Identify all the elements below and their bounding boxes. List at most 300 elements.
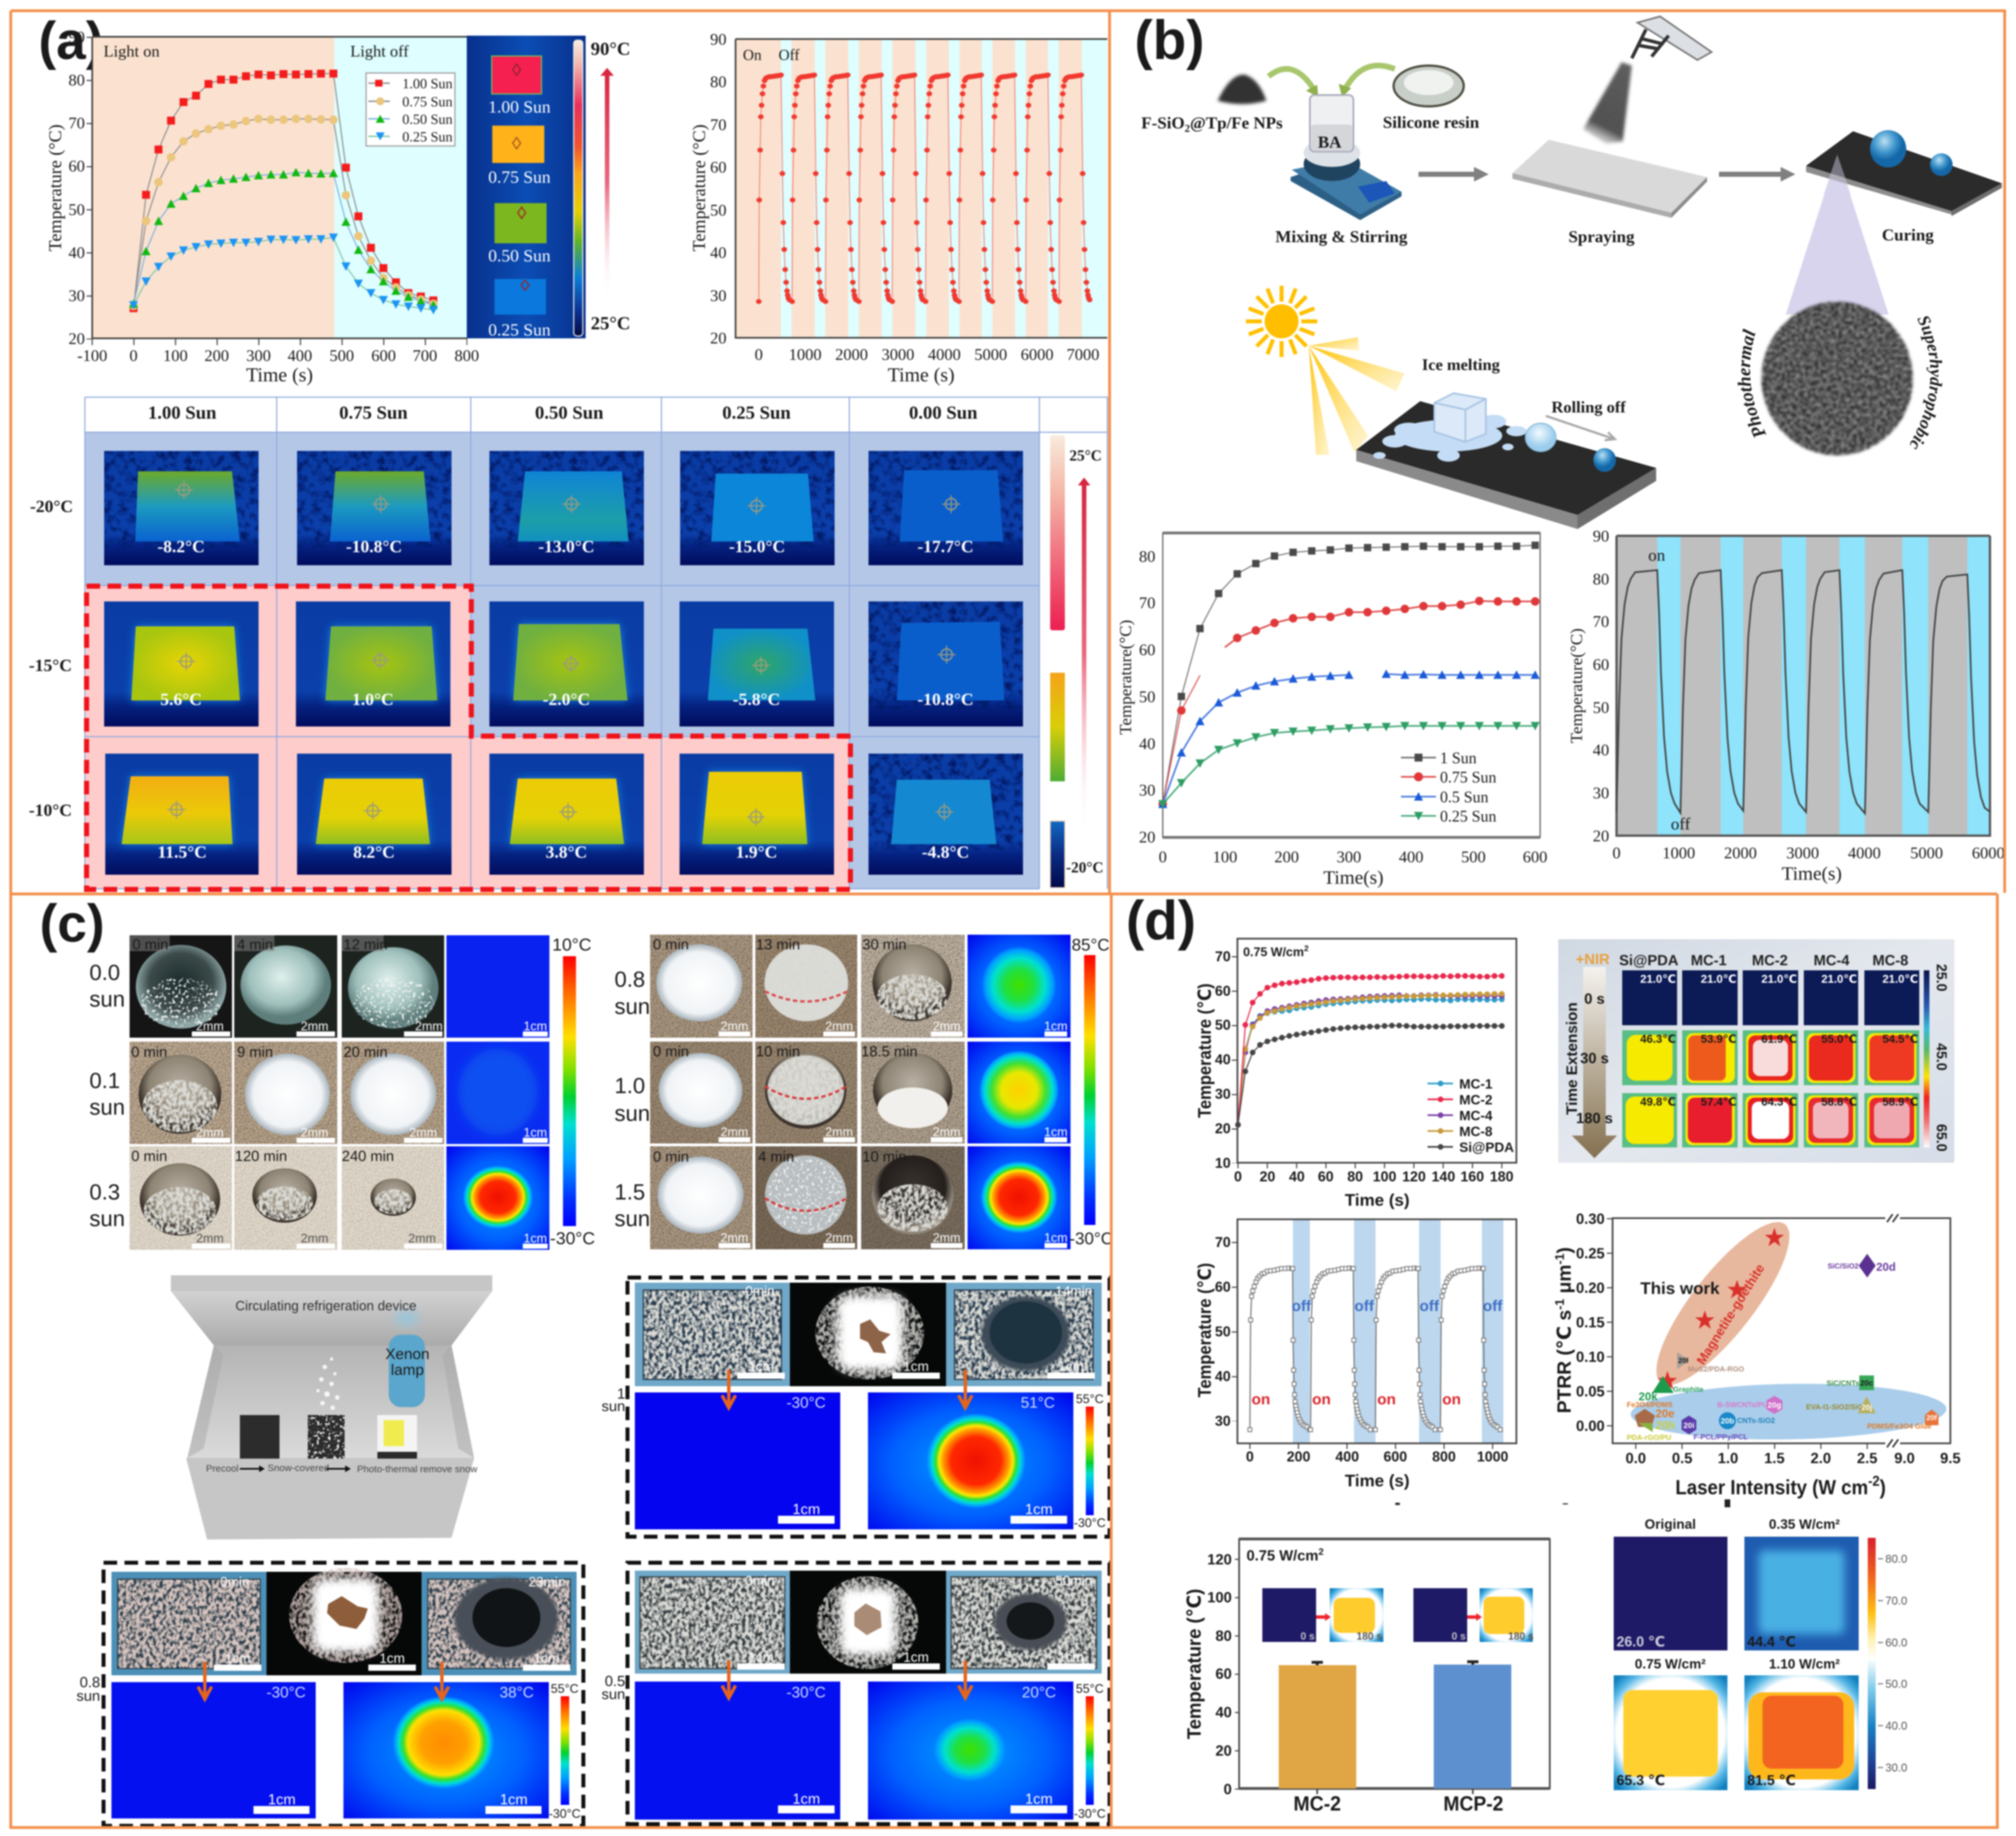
thermal images at four sun intensities with colour bar [467, 36, 586, 339]
arrowhead: spraying to curing [1781, 167, 1795, 182]
photo row: 0.3 sun: 2mm [409, 1231, 436, 1245]
chart: six on/off cycles with grey and cyan bands: 90 [1593, 527, 1609, 545]
chart: heating and cooling curves at four sun intensities: 50 [68, 201, 85, 219]
chart: four NIR on/off cycles: 40 [1215, 1369, 1231, 1384]
chart: PTRR versus laser intensity: -1 [1553, 1298, 1567, 1310]
snow removal panel: 0.5 sun [601, 1563, 1110, 1824]
thermal cell: -20°C, 0.25 Sun: -15.0°C [729, 536, 785, 556]
chart: heating and cooling curves at four sun intensities: 70 [68, 114, 85, 132]
chart: ten on/off heating cycles: Time (s) [888, 364, 955, 386]
chart: heating and cooling curves at four sun intensities: Time (s) [246, 364, 313, 386]
chart: PTRR versus laser intensity: 0.30 [1576, 1210, 1605, 1227]
process labels: Silicone resin [1383, 113, 1480, 132]
literature comparison markers: MoS2/PDA-RGO [1688, 1365, 1744, 1373]
photo row: 0.0 sun: 4 min [237, 936, 273, 953]
chart: six on/off cycles with grey and cyan bands: 30 [1593, 784, 1609, 802]
row: 180 s: 58.9℃ [1882, 1096, 1918, 1108]
dashed red outline: conditions above freezing [87, 586, 850, 889]
row: 30 s: 55.0℃ [1821, 1033, 1857, 1046]
chart: heating curves for MC samples: 120 [1402, 1169, 1426, 1185]
thermal cell: -10°C, 1.00 Sun: 11.5°C [157, 842, 207, 862]
sun intensity labels, left grid: sun [89, 1207, 125, 1231]
snow removal panel: 0.8 sun: -30°C [549, 1807, 581, 1821]
table colour scale and arrow [1050, 435, 1103, 888]
chart: heating curves for MC samples: 160 [1460, 1169, 1484, 1185]
chart: PTRR versus laser intensity: ) [1880, 1476, 1886, 1499]
chart: four NIR on/off cycles: on [1442, 1391, 1461, 1408]
snow removal panel: 0.5 sun: 20°C [1022, 1684, 1056, 1701]
photo row: 0.3 sun: 120 min [235, 1147, 287, 1164]
thermal maps column, left grid [446, 935, 549, 1250]
chart: ten on/off heating cycles: 30 [710, 287, 727, 305]
chart: PTRR versus laser intensity: 0.20 [1576, 1279, 1605, 1296]
chart: heating curves at four sun intensities: 100 [1213, 848, 1237, 866]
thermal cell: -15°C, 0.50 Sun [489, 601, 644, 726]
photo row: 1.5 sun: 2mm [826, 1231, 853, 1245]
snow removal panel: 0.5 sun: 1cm [903, 1650, 929, 1665]
snow removal panel: 0.5 sun: 1cm [792, 1790, 820, 1807]
thermal images at four sun intensities with colour bar: 0.50 Sun [488, 246, 551, 265]
thermal image matrix with time extension arrow: 30 s [1580, 1050, 1609, 1067]
thermal maps at four laser intensities with colour bar: 70.0 [1885, 1595, 1907, 1607]
chart: heating curves for MC samples: 2 [1304, 944, 1309, 953]
legend: MC-8 [1459, 1124, 1493, 1140]
colour scale, left grid [550, 935, 595, 1248]
chart: heating curves at four sun intensities: 40 [1139, 735, 1155, 753]
chart: PTRR versus laser intensity: 0.5 [1672, 1450, 1692, 1467]
chart: ten on/off heating cycles: 60 [710, 158, 727, 177]
row: 0 s: 21.0℃ [1882, 973, 1918, 986]
photo row: 0.3 sun: 2mm [196, 1231, 223, 1245]
legend: MC-4 [1459, 1108, 1493, 1124]
chart: heating curves for MC samples: 20 [1260, 1169, 1275, 1185]
thermal cell: -20°C, 0.00 Sun [869, 451, 1023, 565]
colour scale, right grid: -30°C [1069, 1229, 1113, 1248]
chart: four NIR on/off cycles: off [1355, 1297, 1374, 1314]
curved label: Photothermal: Photothermal [1736, 328, 1768, 439]
row: 0 s: 21.0℃ [1701, 973, 1736, 986]
thermal maps at four laser intensities with colour bar: Original [1645, 1517, 1696, 1532]
photo row: 1.0 sun: 0 min [653, 1043, 689, 1060]
thermal maps at four laser intensities with colour bar: 30.0 [1885, 1762, 1907, 1774]
table column headers: 0.75 Sun [339, 403, 408, 423]
chart: six on/off cycles with grey and cyan bands: 6000 [1972, 844, 2005, 862]
chart: heating curves at four sun intensities: 300 [1336, 848, 1361, 866]
snow removal panel: 1 sun: 51°C [1021, 1394, 1055, 1411]
chart: four NIR on/off cycles: 800 [1432, 1449, 1456, 1465]
thermal cell: -15°C, 1.00 Sun: 5.6°C [160, 689, 202, 709]
legend: 1.00 Sun [402, 76, 453, 92]
row: 30 s: 61.9℃ [1761, 1033, 1797, 1046]
process labels: Spraying [1568, 227, 1635, 246]
micrograph circle [1761, 302, 1913, 455]
thermal maps column, right grid: 1cm [1044, 1231, 1068, 1245]
chart: heating curves for MC samples: Temperature (℃) [1194, 983, 1215, 1118]
thermal maps at four laser intensities with colour bar: 81.5 ℃ [1747, 1773, 1796, 1788]
photo row: 0.8 sun: 30 min [862, 936, 906, 953]
snow removal panel: 1 sun [601, 1278, 1110, 1537]
sun intensity labels, right grid: 1.5 [614, 1180, 645, 1205]
photo row: 0.1 sun: 9 min [237, 1043, 273, 1060]
process labels: BA [1318, 133, 1342, 152]
table column headers: 0.25 Sun [722, 403, 791, 423]
illustration: circulating refrigeration device: Xenon [385, 1345, 429, 1362]
chart: six on/off cycles with grey and cyan bands: Temperature(°C) [1567, 628, 1586, 743]
chart: ten on/off heating cycles: 1000 [789, 346, 822, 364]
chart: heating curves for MC samples: 10 [1215, 1155, 1231, 1171]
colour scale, left grid: 10°C [552, 935, 591, 954]
literature comparison markers: 20h [1656, 1420, 1675, 1432]
thermal cell: -15°C, 1.00 Sun [104, 601, 259, 726]
chart: heating and cooling curves at four sun intensities: 400 [287, 347, 312, 365]
chart: heating and cooling curves at four sun intensities: 300 [246, 347, 271, 365]
sun intensity labels, left grid: 0.3 [89, 1180, 120, 1205]
thermal maps at four laser intensities with colour bar: 0.75 W/cm² [1635, 1657, 1706, 1672]
literature comparison markers: F-PCL/PPy/PCL [1693, 1433, 1748, 1441]
chart: heating curves at four sun intensities: 500 [1461, 848, 1486, 866]
literature comparison markers: CNTs-SiO2 [1737, 1416, 1775, 1425]
table column headers: 1.00 Sun [148, 403, 217, 423]
chart: PTRR versus laser intensity: 9.5 [1940, 1450, 1961, 1467]
chart: PTRR versus laser intensity: 1.5 [1764, 1450, 1785, 1467]
snow removal panel: 0.5 sun: 50min [1055, 1573, 1092, 1589]
snow removal panel: 1 sun: -30°C [786, 1394, 826, 1411]
colour scale [1924, 964, 1949, 1151]
chart: PTRR versus laser intensity: -1 [1553, 1253, 1567, 1265]
snow removal panel: 0.5 sun: sun [601, 1685, 625, 1702]
snow removal panel: 1 sun: sun [601, 1398, 625, 1414]
photo row: 1.0 sun: 2mm [933, 1125, 960, 1139]
bar chart: MC-2 and MCP-2 temperature: 100 [1207, 1589, 1232, 1606]
chart: heating and cooling curves at four sun intensities: 80 [68, 71, 85, 89]
literature comparison markers: SiC/CNTs [1826, 1379, 1859, 1387]
chart: heating curves at four sun intensities: Temperature(°C) [1116, 620, 1135, 735]
process labels: F-SiO [1141, 114, 1185, 132]
chart: six on/off cycles with grey and cyan bands: 3000 [1786, 844, 1819, 862]
sun intensity labels, right grid: 0.8 [614, 968, 645, 992]
chart: heating curves for MC samples: 40 [1289, 1169, 1305, 1185]
literature comparison markers [1627, 1254, 1938, 1442]
panel: d — NIR photothermal performance [1126, 889, 1961, 1815]
chart: six on/off cycles with grey and cyan bands [1567, 527, 2005, 884]
thermal cell: -15°C, 0.25 Sun: -5.8°C [733, 689, 780, 709]
thermal image matrix with time extension arrow [1558, 939, 1954, 1163]
arrowhead: mixing to spraying [1474, 167, 1489, 182]
chart: heating curves for MC samples: 30 [1215, 1086, 1231, 1102]
arrow: spraying to curing [1719, 172, 1781, 177]
sun intensity labels, left grid: 0.1 [89, 1069, 120, 1093]
chart: heating and cooling curves at four sun intensities: 200 [204, 347, 229, 365]
chart: six on/off cycles with grey and cyan bands: on [1648, 546, 1665, 565]
chart: PTRR versus laser intensity: μm [1554, 1265, 1575, 1298]
colour bar labels and red gradient arrow [591, 39, 630, 334]
chart: PTRR versus laser intensity: 1.0 [1718, 1450, 1738, 1467]
photo row: 0.1 sun: 2mm [196, 1125, 223, 1140]
chart: PTRR versus laser intensity: 0.00 [1576, 1417, 1605, 1434]
chart: four NIR on/off cycles: 60 [1215, 1279, 1231, 1295]
legend: 0.25 Sun [402, 130, 453, 145]
legend: MC-2 [1459, 1093, 1493, 1108]
chart: four NIR on/off cycles: 30 [1215, 1413, 1231, 1429]
curved label: Superhydrophobic: Superhydrophobic [1909, 315, 1943, 450]
photo row: 0.0 sun: 2mm [196, 1019, 223, 1033]
row: 180 s: 58.8℃ [1821, 1096, 1857, 1108]
thermal image matrix with time extension arrow: MC-8 [1872, 952, 1908, 969]
chart: four NIR on/off cycles: on [1312, 1391, 1331, 1408]
chart: heating and cooling curves at four sun intensities: 90 [68, 28, 85, 46]
sun intensity labels, right grid: sun [614, 1102, 650, 1126]
chart: PTRR versus laser intensity [1553, 1205, 1961, 1499]
thermal cell: -10°C, 0.25 Sun [680, 754, 834, 875]
sun intensity labels, right grid [614, 968, 650, 1231]
literature comparison markers: Graphite [1673, 1385, 1703, 1394]
chart: PTRR versus laser intensity: 0.10 [1576, 1348, 1605, 1365]
chart: PTRR versus laser intensity: Magnetite-goethite [1693, 1261, 1767, 1367]
chart: four NIR on/off cycles: 200 [1287, 1449, 1310, 1465]
thermal cell: -10°C, 0.00 Sun: -4.8°C [922, 842, 969, 862]
snow removal panel: 0.8 sun: 1cm [500, 1791, 528, 1808]
thermal images at four sun intensities with colour bar: 0.75 Sun [488, 167, 551, 187]
chart: PTRR versus laser intensity: 2.0 [1811, 1450, 1831, 1467]
chart: PTRR versus laser intensity: PTRR (℃ s [1554, 1310, 1575, 1413]
bar chart: MC-2 and MCP-2 temperature: 60 [1215, 1665, 1232, 1682]
chart: heating and cooling curves at four sun intensities: 40 [68, 244, 85, 262]
bar chart: MC-2 and MCP-2 temperature: 80 [1215, 1627, 1232, 1644]
row: 180 s: 57.4℃ [1701, 1096, 1736, 1108]
thermal maps at four laser intensities with colour bar: 44.4 ℃ [1747, 1634, 1796, 1650]
chart: six on/off cycles with grey and cyan bands: 80 [1593, 570, 1609, 588]
sun intensity labels, left grid [89, 961, 125, 1231]
photo row: 0.0 sun: 2mm [301, 1019, 328, 1033]
chart: PTRR versus laser intensity: Laser Intensity (W cm [1675, 1476, 1886, 1499]
snow removal panel: 1 sun: 1cm [903, 1359, 929, 1374]
thermal maps column, right grid [968, 935, 1071, 1249]
chart: six on/off cycles with grey and cyan bands: 40 [1593, 741, 1609, 759]
photo row: 0.0 sun: 0 min [132, 936, 169, 953]
thermal maps at four laser intensities with colour bar: 50.0 [1885, 1678, 1907, 1691]
chart: heating curves at four sun intensities: 70 [1139, 594, 1155, 612]
chart: four NIR on/off cycles: Time (s) [1345, 1472, 1409, 1490]
table row labels: -10°C [29, 800, 72, 820]
chart: heating and cooling curves at four sun intensities: 0 [130, 347, 137, 365]
thermal image matrix with time extension arrow: Time Extension [1563, 1002, 1580, 1115]
colour scale: 45.0 [1933, 1043, 1949, 1070]
snow removal panel: 1 sun: 55°C [1076, 1392, 1104, 1406]
table column headers: 0.50 Sun [535, 403, 604, 423]
chart: six on/off cycles with grey and cyan bands: 0 [1613, 844, 1620, 862]
legend: 0.75 Sun [1440, 769, 1497, 786]
chart: ten on/off heating cycles: 3000 [882, 346, 914, 364]
thermal cell: -15°C, 0.75 Sun [296, 601, 450, 726]
sun intensity labels, left grid: 0.0 [89, 961, 120, 985]
chart: ten on/off heating cycles: 0 [755, 346, 763, 364]
snow removal panel: 1 sun: 14min [1055, 1284, 1092, 1299]
chart: four NIR on/off cycles: on [1377, 1391, 1396, 1408]
snow removal panel: 0.8 sun [76, 1563, 583, 1826]
chart: PTRR versus laser intensity: 0.0 [1626, 1450, 1646, 1467]
photo row: 1.0 sun [650, 1042, 965, 1143]
chart: heating curves at four sun intensities: 400 [1399, 848, 1424, 866]
row: 180 s: 64.3℃ [1761, 1096, 1797, 1108]
sun intensity labels, left grid: sun [89, 987, 125, 1012]
snow removal panel: 0.5 sun: -30°C [1074, 1807, 1106, 1821]
photo row: 0.1 sun: 20 min [343, 1043, 388, 1060]
chart: heating curves for MC samples: 140 [1432, 1169, 1455, 1185]
chart: six on/off cycles with grey and cyan bands: 5000 [1910, 844, 1943, 862]
snow removal panel: 0.5 sun: -30°C [786, 1684, 826, 1701]
bar chart: MC-2 and MCP-2 temperature: 20 [1215, 1742, 1232, 1759]
thermal maps at four laser intensities with colour bar: 80.0 [1885, 1553, 1907, 1566]
table colour scale and arrow: 25°C [1069, 447, 1102, 464]
illustration: circulating refrigeration device: Circulating refrigeration device [235, 1298, 416, 1314]
chart: six on/off cycles with grey and cyan bands: off [1671, 815, 1690, 833]
snow removal panel: 1 sun: 1cm [792, 1500, 820, 1517]
chart: PTRR versus laser intensity: ) [1554, 1247, 1575, 1253]
chart: four NIR on/off cycles: 0 [1246, 1449, 1254, 1465]
sun intensity labels, right grid: 1.0 [614, 1074, 645, 1098]
thermal maps column, left grid: 1cm [523, 1019, 547, 1033]
chart: PTRR versus laser intensity: 0.05 [1576, 1383, 1605, 1400]
chart: four NIR on/off cycles: off [1483, 1297, 1503, 1314]
literature comparison markers: PDA-rGO/PU [1627, 1433, 1671, 1442]
chart: four NIR on/off cycles: 1000 [1477, 1449, 1508, 1465]
photo row: 0.1 sun: 2mm [301, 1125, 328, 1140]
table row labels: -15°C [29, 655, 72, 675]
snow removal panel: 1 sun: 1 [617, 1385, 625, 1402]
chart: six on/off cycles with grey and cyan bands: 50 [1593, 699, 1609, 717]
thermal cell: -15°C, 0.00 Sun: -10.8°C [917, 689, 974, 709]
snow removal panel: 0.8 sun: sun [76, 1687, 100, 1704]
colour scale, right grid [1069, 936, 1113, 1248]
ice melting labels [1422, 356, 1626, 416]
chart: heating and cooling curves at four sun intensities: 600 [371, 347, 396, 365]
chart: ten on/off heating cycles: 4000 [928, 346, 961, 364]
chart: heating curves for MC samples: 20 [1215, 1121, 1231, 1137]
chart: four NIR on/off cycles: Temperature (℃) [1194, 1263, 1215, 1398]
sun intensity labels, left grid: sun [89, 1095, 125, 1120]
chart: heating curves for MC samples: 60 [1215, 983, 1231, 999]
panel label c: (c) [40, 893, 105, 953]
thermal maps column, right grid: 1cm [1044, 1125, 1068, 1139]
chart: heating curves for MC samples [1194, 939, 1516, 1210]
chart: heating curves at four sun intensities: 0 [1159, 848, 1167, 866]
photo row: 0.0 sun [130, 935, 444, 1038]
chart: heating curves at four sun intensities: 600 [1523, 848, 1548, 866]
row: 30 s: 54.5℃ [1882, 1033, 1918, 1046]
bar chart: MC-2 and MCP-2 temperature: MCP-2 [1443, 1792, 1503, 1815]
snow removal panel: 1 sun: 1cm [1025, 1500, 1053, 1517]
photo row: 0.1 sun: 2mm [410, 1125, 437, 1140]
literature comparison markers: 20i [1683, 1421, 1695, 1430]
thermal cell: -20°C, 1.00 Sun [104, 451, 259, 565]
chart: PTRR versus laser intensity: This work [1640, 1279, 1720, 1298]
legend: 0.75 Sun [402, 94, 453, 110]
photo row: 0.8 sun: 0 min [653, 936, 689, 953]
inset thermal pairs [1262, 1588, 1534, 1642]
illustration: circulating refrigeration device: Snow-covered [268, 1463, 329, 1473]
chart: heating and cooling curves at four sun intensities: 30 [68, 287, 85, 305]
literature comparison markers: PDMS/Fe3O4 Glue [1867, 1422, 1931, 1430]
photo row: 0.3 sun: 0 min [131, 1147, 167, 1164]
photo row: 0.0 sun: 12 min [343, 936, 388, 953]
ice melting labels: Ice melting [1422, 356, 1500, 374]
photo row: 0.1 sun: 0 min [131, 1043, 167, 1060]
thermal cell: -20°C, 0.75 Sun: -10.8°C [346, 536, 402, 556]
thermal cell: -20°C, 1.00 Sun: -8.2°C [157, 536, 205, 556]
chart: heating curves at four sun intensities [1116, 533, 1548, 888]
colour scale, left grid: -30°C [550, 1228, 595, 1248]
chart: heating and cooling curves at four sun intensities: Light off [350, 42, 409, 61]
chart: ten on/off heating cycles: 2000 [835, 346, 868, 364]
chart: ten on/off heating cycles: 5000 [974, 346, 1007, 364]
chart: heating and cooling curves at four sun intensities: -100 [77, 347, 108, 365]
photo row: 0.8 sun: 2mm [721, 1019, 748, 1033]
chart: heating and cooling curves at four sun intensities [45, 28, 479, 386]
thermal maps at four laser intensities with colour bar: 26.0 ℃ [1617, 1634, 1665, 1650]
ice melting labels: Rolling off [1551, 398, 1626, 416]
row: 0 s: 21.0℃ [1761, 973, 1797, 986]
process labels: 2 [1185, 123, 1190, 135]
legend: MC-1 [1459, 1077, 1493, 1092]
photo row: 1.0 sun: 2mm [826, 1125, 853, 1139]
chart: PTRR versus laser intensity: 2.5 [1857, 1450, 1877, 1467]
thermal cell: -10°C, 0.75 Sun [297, 754, 452, 875]
table row labels: -20°C [30, 496, 73, 516]
chart: heating curves for MC samples: 70 [1215, 949, 1231, 965]
row: 180 s [1622, 1093, 1919, 1147]
chart: heating curves at four sun intensities: 50 [1139, 688, 1155, 706]
snow removal panel: 0.5 sun: 55°C [1076, 1682, 1104, 1696]
legend [366, 73, 455, 146]
table column headers [148, 403, 978, 423]
colour bar labels and red gradient arrow: 90°C [591, 39, 630, 59]
chart: heating and cooling curves at four sun intensities: 20 [68, 330, 85, 348]
snow removal panel: 0.8 sun: 23min [528, 1575, 565, 1590]
chart: six on/off cycles with grey and cyan bands: 1000 [1662, 844, 1695, 862]
chart: heating curves for MC samples: 100 [1373, 1169, 1396, 1185]
photo row: 1.5 sun: 4 min [758, 1148, 794, 1165]
chart: heating curves for MC samples: 80 [1347, 1169, 1363, 1185]
colour bar labels and red gradient arrow: 25°C [591, 313, 630, 334]
chart: heating curves at four sun intensities: 80 [1139, 548, 1155, 566]
chart: ten on/off heating cycles: 7000 [1067, 346, 1099, 364]
thermal cell: -10°C, 0.50 Sun: 3.8°C [545, 842, 587, 862]
row: 30 s: 53.9℃ [1701, 1033, 1736, 1046]
table column headers: 0.00 Sun [909, 403, 978, 423]
thermal maps column, left grid: 1cm [523, 1231, 547, 1245]
photo row: 0.8 sun: 2mm [826, 1019, 853, 1033]
photo row: 0.3 sun: 2mm [301, 1231, 328, 1245]
chart: ten on/off heating cycles: Off [779, 46, 799, 63]
sun intensity labels, right grid: sun [614, 995, 650, 1019]
illustration: ice melting on coated slab [1356, 393, 1656, 529]
chart: six on/off cycles with grey and cyan bands: 2000 [1724, 844, 1757, 862]
thermal image matrix with time extension arrow: +NIR [1576, 951, 1610, 968]
snow removal panel: 0.8 sun: 55°C [551, 1682, 579, 1696]
thermal maps at four laser intensities with colour bar: 40.0 [1885, 1720, 1907, 1732]
literature comparison markers: 20d [1876, 1261, 1895, 1274]
chart: four NIR on/off cycles: off [1420, 1297, 1439, 1314]
legend [1401, 750, 1497, 825]
row: 180 s: 49.8℃ [1640, 1096, 1676, 1108]
thermal maps at four laser intensities with colour bar: 0.35 W/cm² [1769, 1517, 1840, 1532]
thermal image matrix with time extension arrow: Si@PDA [1619, 952, 1679, 969]
literature comparison markers: B-SWCNTs/PU [1717, 1400, 1768, 1409]
colour scale: 25.0 [1933, 964, 1949, 991]
chart: ten on/off heating cycles: 6000 [1021, 346, 1054, 364]
legend [1428, 1077, 1514, 1155]
photo row: 1.0 sun: 2mm [721, 1125, 748, 1139]
